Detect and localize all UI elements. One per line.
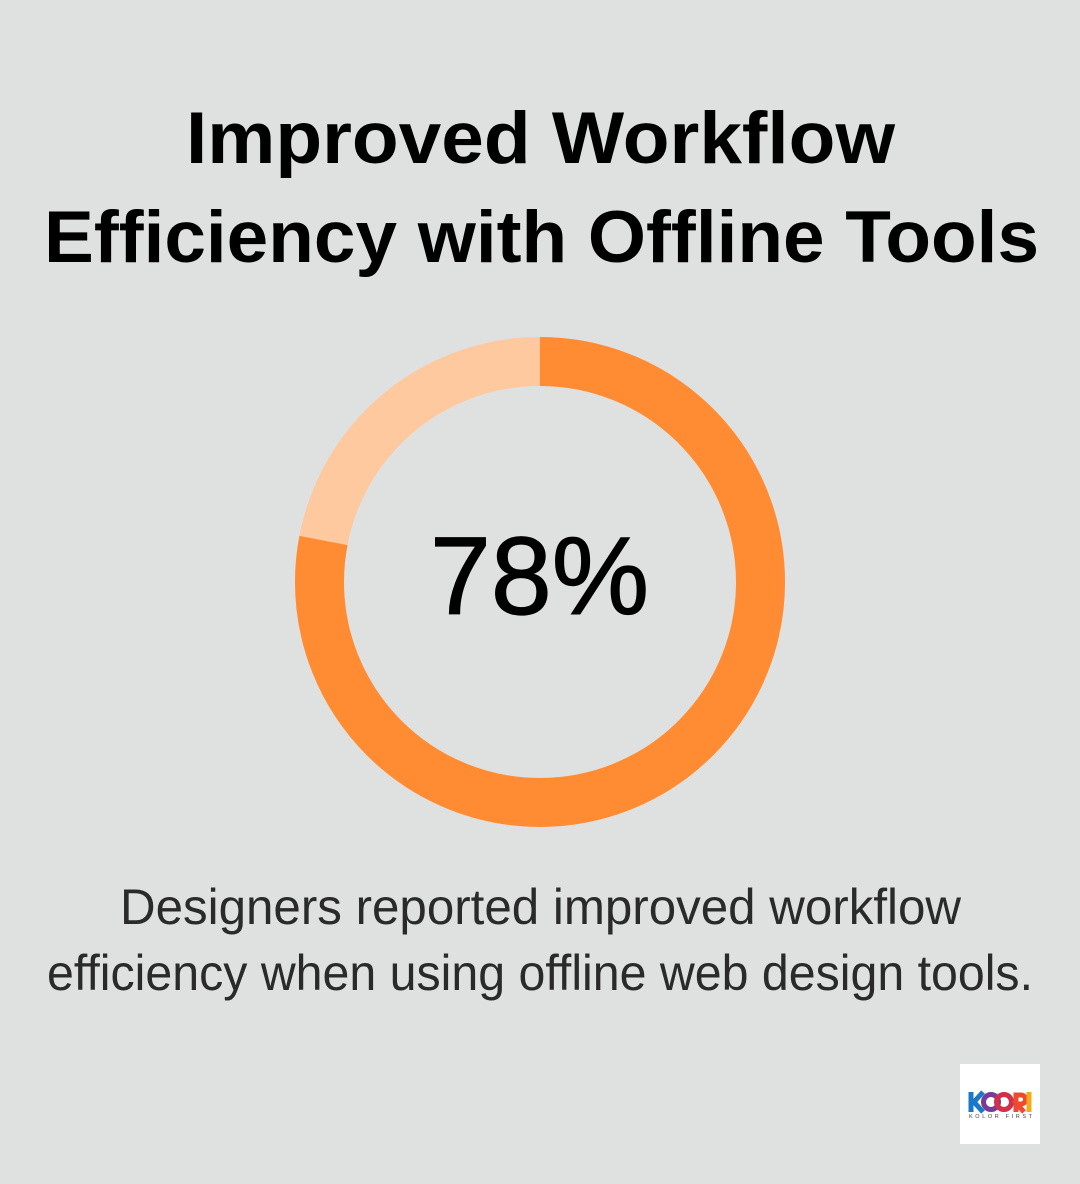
logo: Koori: KOLOR FIRST xyxy=(969,1114,1033,1120)
description text xyxy=(47,879,1033,1001)
title: Improved Workflow xyxy=(186,98,895,179)
donut chart: 78% xyxy=(320,362,760,802)
description text: Designers reported improved workflow xyxy=(120,879,962,935)
description text: efficiency when using offline web design tools. xyxy=(47,945,1033,1001)
logo: Koori xyxy=(960,1064,1040,1144)
title xyxy=(44,98,1039,278)
title: Efficiency with Offline Tools xyxy=(44,197,1039,278)
donut value: 78% xyxy=(430,515,649,638)
